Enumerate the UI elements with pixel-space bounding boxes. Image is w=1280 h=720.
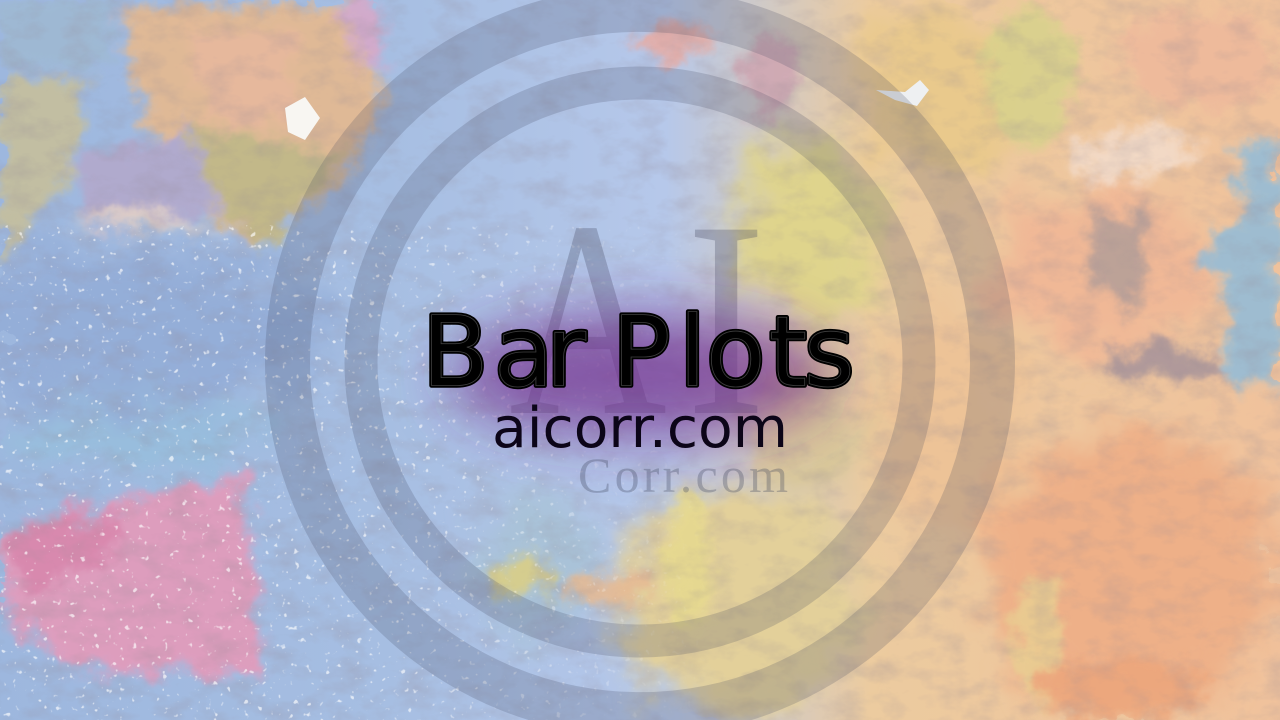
title: Bar Plots bbox=[422, 296, 855, 408]
watermark: Corr.com: Corr.com bbox=[578, 447, 788, 503]
white paint highlight bbox=[285, 97, 320, 140]
watermark: concentric rings bbox=[265, 0, 1015, 720]
glossy paint specks bbox=[0, 225, 720, 720]
white paint fleck right bbox=[876, 80, 929, 106]
watermark: AI letters: I bbox=[686, 164, 766, 474]
watermark: AI letters bbox=[509, 164, 766, 474]
subtitle: aicorr.com bbox=[492, 396, 788, 461]
title: Bar Plots bbox=[422, 296, 855, 408]
purple glow behind title bbox=[450, 314, 830, 438]
watermark: AI letters: A bbox=[509, 164, 667, 474]
